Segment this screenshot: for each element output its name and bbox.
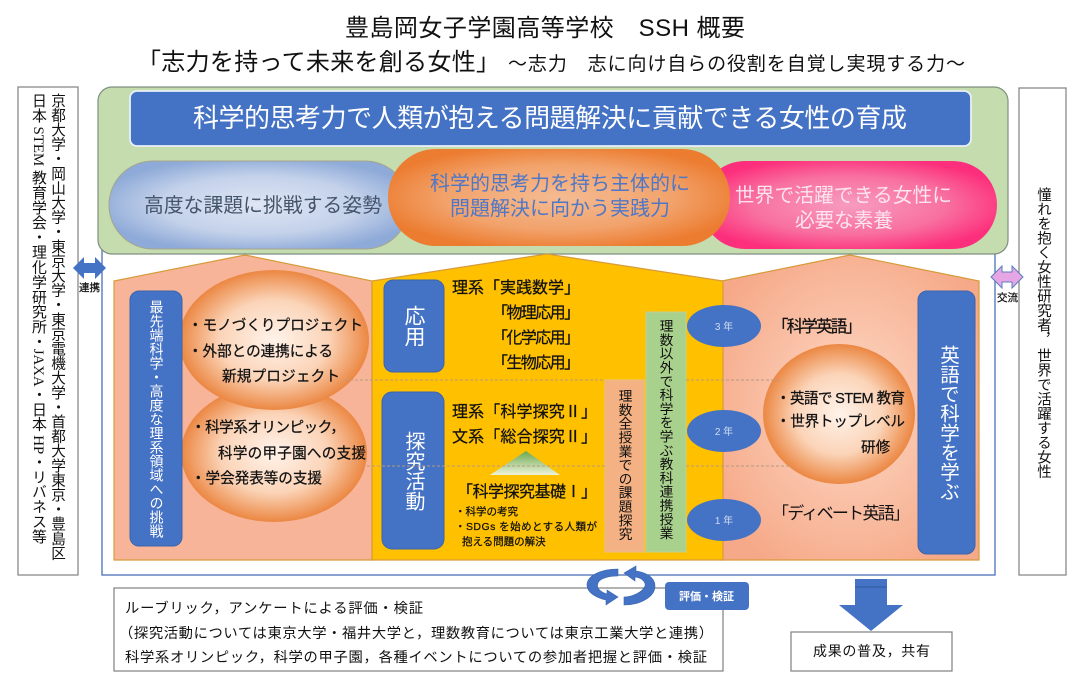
label: application: 応用 <box>402 305 426 347</box>
pill: advanced challenge <box>109 161 409 249</box>
arrow: dissemination <box>839 579 903 631</box>
foundation course <box>455 483 598 548</box>
bubble: English STEM: 研修 <box>861 439 891 456</box>
icon: cycle arrows <box>587 566 655 605</box>
label: evaluation and verification <box>665 582 749 610</box>
grade markers <box>687 305 761 541</box>
arrow: exchange <box>991 266 1023 304</box>
pill: advanced challenge: 高度な課題に挑戦する姿勢 <box>144 195 382 217</box>
label: advanced science: 最先端科学・高度な理系領域への挑戦 <box>148 300 164 539</box>
label: learn science in English <box>918 291 975 554</box>
bubble: support: ・科学系オリンピック， <box>191 419 345 436</box>
label: inquiry: 探究活動 <box>402 431 425 511</box>
label: advanced science <box>130 291 182 546</box>
column: cross-subject classes: 理数以外で科学を学ぶ教科連携授業 <box>658 319 673 540</box>
arrow: collaboration <box>73 257 106 294</box>
box: dissemination of results: 成果の普及，共有 <box>813 643 930 659</box>
goal banner <box>130 91 971 146</box>
bubble: projects: 新規プロジェクト <box>222 368 340 385</box>
column: inquiry in all classes: 理数全授業での課題探究 <box>616 389 632 542</box>
column: inquiry in all classes <box>605 380 644 552</box>
grade 1: 1 年 <box>715 514 733 527</box>
foundation course: 抱える問題の解決 <box>462 535 546 548</box>
bubble: support: ・学会発表等の支援 <box>191 469 322 487</box>
goal banner: 科学的思考力で人類が抱える問題解決に貢献できる女性の育成 <box>193 103 907 133</box>
pill: global literacy: 必要な素養 <box>795 210 893 232</box>
panel: role model women: 世界で活躍する女性 <box>1035 348 1051 479</box>
panel: centre house <box>372 254 723 560</box>
bubble: English STEM: ・世界トップレベル <box>776 413 905 430</box>
pill: practical skill <box>388 149 730 246</box>
grade dividers <box>345 380 790 466</box>
applied courses <box>452 279 580 372</box>
column: cross-subject classes <box>646 312 686 552</box>
icon: green triangle <box>490 451 560 475</box>
bubble: English STEM <box>763 344 915 484</box>
label: application <box>384 280 444 372</box>
course: debate English: 「ディベート英語」 <box>772 503 910 523</box>
title: 豊島岡女子学園高等学校 SSH 概要 <box>345 15 745 42</box>
panel: role model women: 憧れを抱く女性研究者， <box>1035 187 1051 346</box>
box: dissemination of results <box>791 632 952 671</box>
panel: evaluation methods: （探究活動については東京大学・福井大学と，理数教育については東京工業大学と連携） <box>119 625 713 642</box>
foundation course: ・科学の考究 <box>455 505 518 518</box>
title: 「志力を持って未来を創る女性」 <box>137 49 500 76</box>
bubble: projects: ・外部との連携による <box>188 343 333 360</box>
panel: evaluation methods <box>114 588 723 671</box>
panel: left house <box>114 255 372 560</box>
panel: evaluation methods: 科学系オリンピック，科学の甲子園，各種イベントについての参加者把握と評価・検証 <box>125 649 707 666</box>
panel: programme frame <box>102 240 995 575</box>
foundation course: ・SDGs を始めとする人類が <box>455 520 598 533</box>
panel: right house <box>722 255 979 560</box>
applied courses: 「物理応用」 <box>492 304 580 322</box>
grade 2: 2 年 <box>715 425 733 438</box>
label: evaluation and verification: 評価・検証 <box>679 589 734 603</box>
panel: goals <box>98 87 1008 254</box>
foundation course: 「科学探究基礎Ⅰ」 <box>457 483 597 501</box>
title: ～志力 志に向け自らの役割を自覚し実現する力～ <box>508 53 965 75</box>
course: science English: 「科学英語」 <box>772 317 862 336</box>
grade 3 <box>687 305 761 347</box>
inquiry courses <box>452 403 597 446</box>
pill: practical skill: 問題解決に向かう実践力 <box>450 197 670 220</box>
panel: partner organisations: 日本 STEM 教育学会・理化学研究所・JAXA・日本 HP・リバネス等 <box>30 93 46 544</box>
bubble: support: 科学の甲子園への支援 <box>218 445 366 462</box>
title <box>137 15 965 76</box>
bubble: projects: ・モノづくりプロジェクト <box>188 317 363 334</box>
pill: global literacy: 世界で活躍できる女性に <box>735 185 952 207</box>
applied courses: 「生物応用」 <box>492 354 580 372</box>
arrow: collaboration: 連携 <box>79 281 100 294</box>
bubble: English STEM: ・英語で STEM 教育 <box>776 389 905 407</box>
bubble: projects <box>179 270 369 410</box>
pill: practical skill: 科学的思考力を持ち主体的に <box>430 172 690 195</box>
grade 3: 3 年 <box>715 320 733 333</box>
panel: partner organisations <box>18 87 78 575</box>
bubble: support <box>181 384 367 522</box>
applied courses: 理系「実践数学」 <box>452 279 580 297</box>
pill: global literacy <box>701 161 997 249</box>
inquiry courses: 理系「科学探究Ⅱ」 <box>452 403 597 421</box>
panel: role model women <box>1019 88 1066 575</box>
label: learn science in English: 英語で科学を学ぶ <box>936 345 959 501</box>
grade 1 <box>687 499 761 541</box>
panel: partner organisations: 京都大学・岡山大学・東京大学・東京電機大学・首都大学東京・豊島区 <box>49 93 65 560</box>
arrow: exchange: 交流 <box>997 292 1018 304</box>
label: inquiry <box>382 392 444 549</box>
grade 2 <box>687 410 761 452</box>
applied courses: 「化学応用」 <box>492 329 580 347</box>
panel: evaluation methods: ルーブリック，アンケートによる評価・検証 <box>125 599 423 617</box>
inquiry courses: 文系「総合探究Ⅱ」 <box>452 428 597 446</box>
